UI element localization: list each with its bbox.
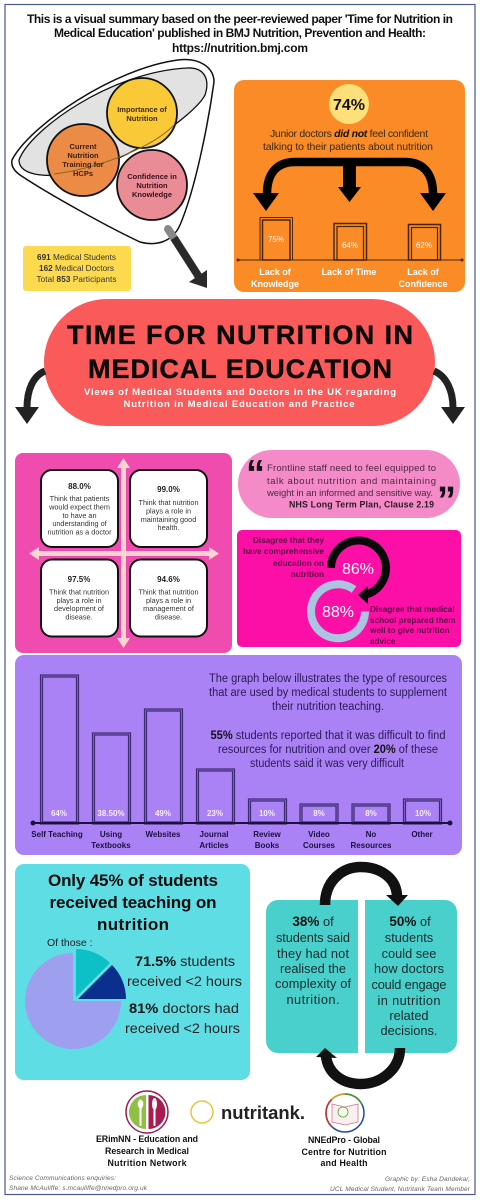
organisation name: NNEdPro: and Health — [320, 1158, 368, 1168]
card: 94.6%: plays a role in — [146, 596, 191, 605]
bar labels: Self Teaching — [31, 830, 83, 839]
bar values — [51, 809, 431, 818]
card: 97.5%: disease. — [65, 612, 93, 622]
participants box: 691 Medical Students — [37, 253, 116, 262]
pie statistics: received <2 hours — [127, 973, 242, 989]
theme: confidence: Nutrition — [136, 181, 168, 190]
pie statistics — [125, 953, 242, 1036]
pie chart — [25, 949, 126, 1049]
logo: NNEdPro — [326, 1094, 364, 1132]
organisation name: NNEdPro: Centre for Nutrition — [302, 1147, 386, 1157]
axis — [30, 820, 452, 826]
theme: confidence — [117, 150, 187, 220]
title pill — [44, 299, 435, 426]
ring: 86% — [331, 541, 386, 604]
organisation name: ERimNN: ERimNN - Education and — [96, 1134, 198, 1144]
card: 88.0%: nutrition as a doctor — [47, 528, 112, 536]
bar chart: barriers — [237, 218, 463, 261]
card: 97.5%: Think that nutrition — [49, 588, 109, 596]
card: 97.5% — [41, 560, 118, 636]
quote marks: “ — [246, 453, 265, 495]
heading: Only 45% of students — [48, 871, 218, 890]
panel: 50% engagement — [365, 900, 457, 1053]
bar labels: Courses — [303, 841, 336, 850]
panel: NHS quote: weight in an informed and sensitive way. — [266, 488, 433, 499]
credit: science communications: Shane McAuliffe: s.mcauliffe@nnedpro.org.uk — [9, 1185, 148, 1192]
panel: 38% complexity — [266, 900, 358, 1053]
theme: current training: Current — [69, 142, 97, 151]
bar labels: Books — [255, 841, 280, 850]
panel: NHS quote: Frontline staff need to feel equipped to — [267, 463, 436, 474]
arrow: title to right — [434, 371, 465, 424]
ring: 86%: 86% — [342, 561, 374, 578]
title: source statement: https://nutrition.bmj.com — [172, 41, 308, 55]
organisation name: NNEdPro: NNEdPro - Global — [308, 1135, 380, 1145]
chart description: 55% students reported that it was difficult to find — [210, 730, 446, 742]
theme: confidence: Confidence in — [127, 172, 177, 181]
credit: graphic author — [330, 1176, 471, 1193]
card: 99.0%: health. — [158, 523, 179, 532]
theme: importance of nutrition — [107, 78, 177, 148]
bar values and labels — [251, 235, 448, 289]
card: 88.0%: would expect them — [48, 502, 110, 512]
card: 99.0% — [130, 470, 207, 547]
card: 97.5%: plays a role in — [56, 596, 102, 605]
panel: education disagreement — [237, 530, 461, 647]
card: 99.0%: plays a role in — [146, 506, 191, 516]
quote marks — [246, 453, 456, 522]
statement text: talking to their patients about nutrition — [263, 141, 433, 153]
theme: importance of nutrition: Importance of — [117, 105, 167, 114]
credit: graphic author: UCL Medical Student, Nutritank Team Member — [330, 1186, 471, 1193]
participants box — [23, 246, 131, 291]
bar labels: No — [366, 830, 376, 839]
card: 94.6% — [130, 560, 207, 636]
label: comprehensive education: have comprehensive — [243, 547, 324, 556]
card: 99.0%: Think that nutrition — [138, 498, 199, 507]
panel: 38% complexity: they had not — [277, 946, 349, 961]
title: source statement: This is a visual summary based on the peer-reviewed paper 'Time for Nutrition in — [27, 12, 453, 26]
of those label: Of those : — [47, 937, 93, 949]
chart description: that are used by medical students to supplement — [209, 687, 448, 699]
arrow: funnel to title — [168, 229, 207, 288]
panel: 38% complexity: 38% of — [292, 914, 334, 929]
panel: teaching received — [15, 864, 250, 1080]
bar values and labels: 75% — [268, 235, 284, 244]
bar values: 49% — [155, 809, 171, 818]
card: 94.6%: Think that nutrition — [138, 588, 199, 596]
panel: 38% complexity: nutrition. — [286, 992, 340, 1007]
theme: current training — [47, 124, 174, 196]
bar values: 10% — [415, 809, 431, 818]
card: 88.0%: 88.0% — [68, 482, 91, 491]
theme: confidence: Knowledge — [132, 190, 172, 199]
card: 97.5%: 97.5% — [68, 575, 90, 584]
organisation name: ERimNN: Nutrition Network — [108, 1158, 187, 1168]
bar labels: Using — [100, 830, 122, 839]
bar values and labels: Lack of Time — [322, 267, 376, 277]
label: prepared by medical school: well to give nutrition — [369, 626, 450, 635]
panel: 38% complexity: realised the — [280, 961, 346, 976]
bar labels: Journal — [200, 830, 228, 839]
quote marks: ” — [437, 480, 456, 522]
panel: 50% engagement: how doctors — [374, 961, 444, 976]
label: comprehensive education: Disagree that they — [253, 536, 324, 545]
bar values and labels: Confidence — [398, 279, 448, 289]
theme: current training: Nutrition — [67, 151, 99, 160]
card: 88.0%: to have an — [62, 511, 97, 520]
bar values: 10% — [259, 809, 275, 818]
card: 88.0%: Think that patients — [50, 494, 110, 503]
statement text — [263, 128, 433, 153]
bar labels — [31, 830, 433, 850]
card: 94.6%: disease. — [155, 612, 182, 622]
logo: ERimNN — [126, 1091, 168, 1133]
bar values: 8% — [313, 809, 325, 818]
cross arrows — [29, 458, 219, 648]
chart description: resources for nutrition and over 20% of these — [218, 744, 438, 756]
organisation name: NNEdPro — [302, 1135, 386, 1168]
bar values: 8% — [365, 809, 377, 818]
organisation name: ERimNN: Research in Medical — [105, 1146, 189, 1156]
panel: NHS quote: talk about nutrition and maintaining — [267, 476, 436, 487]
bar labels: Articles — [199, 841, 229, 850]
theme: current training: HCPs — [73, 169, 93, 178]
label: prepared by medical school: school prepared them — [370, 616, 456, 625]
subtitle: Nutrition in Medical Education and Practice — [124, 399, 354, 410]
bars — [42, 676, 440, 823]
main title: MEDICAL EDUCATION — [88, 354, 392, 384]
credit: graphic author: Graphic by: Esha Dandekar, — [385, 1176, 470, 1183]
card: 94.6%: 94.6% — [157, 575, 180, 584]
heading: nutrition — [97, 915, 169, 934]
panel: 50% engagement: in nutrition — [378, 993, 440, 1008]
participants box: Total 853 Participants — [36, 275, 116, 284]
title: source statement — [27, 12, 453, 55]
title: source statement: Medical Education' published in BMJ Nutrition, Prevention and Health: — [54, 26, 426, 40]
card: 99.0%: maintaining good — [141, 515, 196, 524]
panel: 38% complexity: students said — [276, 930, 350, 945]
panel: attitudes to nutrition — [15, 453, 232, 653]
label: prepared by medical school: Disagree that medical — [370, 605, 455, 614]
panel: resources bar chart — [15, 655, 462, 855]
bar labels: Resources — [351, 841, 392, 850]
label: comprehensive education: nutrition — [291, 570, 324, 579]
pie statistics: received <2 hours — [125, 1020, 240, 1036]
organisation name: ERimNN — [96, 1134, 198, 1168]
heading: received teaching on — [50, 893, 216, 912]
card: 99.0%: 99.0% — [157, 485, 180, 494]
chart description: students said it was very difficult — [250, 758, 405, 770]
ring: 88%: 88% — [322, 604, 354, 621]
cycle arrow: bottom — [316, 1048, 400, 1084]
funnel diagram: study themes — [12, 60, 214, 244]
main title — [67, 320, 413, 384]
theme: current training: Training for — [62, 160, 104, 169]
panel: 50% engagement: 50% of — [389, 914, 431, 929]
arrow: title to left — [15, 371, 45, 424]
panel: NHS quote — [238, 450, 460, 522]
credit: science communications: Science Communications enquiries: — [9, 1175, 116, 1182]
statement text: Junior doctors did not feel confident — [270, 128, 428, 140]
bar values: 23% — [207, 809, 223, 818]
bar values and labels: 62% — [416, 241, 432, 250]
logo: nutritank: nutritank. — [221, 1103, 305, 1123]
pie statistics: 81% doctors had — [129, 1000, 239, 1016]
bar labels: Video — [308, 830, 330, 839]
chart description: The graph below illustrates the type of resources — [209, 673, 447, 685]
three-way arrow — [253, 160, 446, 211]
chart description: their nutrition teaching. — [272, 701, 384, 713]
panel: 50% engagement: could see — [382, 946, 436, 961]
bar inner outlines — [42, 676, 440, 823]
bar values and labels: Lack of — [407, 267, 440, 277]
card: 88.0%: understanding of — [52, 519, 108, 528]
label: comprehensive education — [243, 536, 324, 579]
subtitle — [84, 387, 396, 410]
bar labels: Other — [411, 830, 433, 839]
label: comprehensive education: education on — [273, 559, 324, 568]
bar labels: Textbooks — [91, 841, 131, 850]
bar labels: Websites — [146, 830, 181, 839]
stat circle 74%: 74% — [333, 97, 365, 114]
panel: 50% engagement: decisions. — [381, 1023, 437, 1038]
panel: 38% complexity: complexity of — [275, 976, 351, 991]
cycle arrow: top — [325, 867, 408, 906]
bar values and labels: Knowledge — [251, 279, 299, 289]
card: 97.5%: development of — [54, 604, 105, 613]
bar values: 38.50% — [97, 809, 125, 818]
bar labels: Review — [253, 830, 282, 839]
card: 88.0% — [41, 470, 118, 547]
heading — [48, 871, 218, 934]
panel: 50% engagement: students — [385, 930, 433, 945]
panel: NHS quote: NHS Long Term Plan, Clause 2.19 — [289, 500, 434, 510]
label: prepared by medical school: advice — [370, 637, 396, 646]
chart description — [209, 673, 448, 770]
theme: importance of nutrition: Nutrition — [126, 114, 158, 123]
bar values and labels: Lack of — [259, 267, 292, 277]
ring: 88% — [311, 584, 365, 638]
pie statistics: 71.5% students — [135, 953, 235, 969]
bar values and labels: 64% — [342, 241, 358, 250]
stat circle 74% — [329, 84, 369, 124]
subtitle: Views of Medical Students and Doctors in the UK regarding — [84, 387, 396, 398]
label: prepared by medical school — [369, 605, 456, 646]
logo: nutritank — [191, 1101, 305, 1123]
credit: science communications — [9, 1175, 148, 1192]
card: 94.6%: management of — [143, 604, 195, 613]
participants box: 162 Medical Doctors — [39, 264, 114, 273]
main title: TIME FOR NUTRITION IN — [67, 320, 413, 350]
panel: junior doctors confidence — [234, 80, 465, 292]
panel: 50% engagement: could engage — [372, 977, 446, 992]
bar values: 64% — [51, 809, 67, 818]
panel: 50% engagement: related — [389, 1008, 429, 1023]
